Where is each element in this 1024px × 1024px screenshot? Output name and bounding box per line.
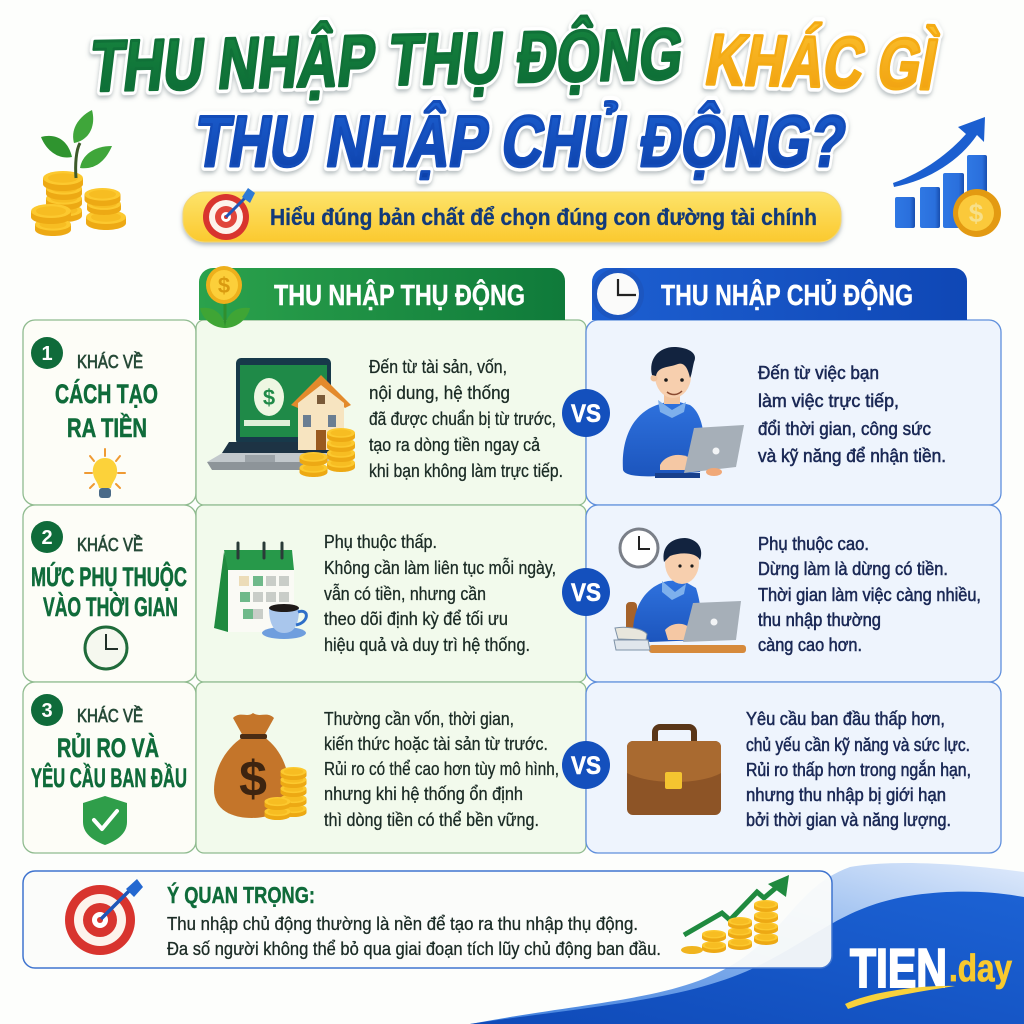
text: active row 1: làm việc trực tiếp, <box>758 390 899 411</box>
text: active row 1 <box>758 362 946 466</box>
text: active row 3 <box>746 708 971 830</box>
panel: label cách tạo ra tiền: KHÁC VỀ <box>77 351 143 372</box>
vs badge 2 <box>562 568 610 616</box>
text: passive row 3: nhưng khi hệ thống ổn định <box>324 784 523 804</box>
panel: active row 2 <box>586 505 1001 682</box>
panel: label rủi ro: 3 <box>41 700 53 722</box>
icon: money bag and coins: $ <box>239 751 267 807</box>
panel: label mức phụ thuộc: VÀO THỜI GIAN <box>43 591 178 622</box>
text: passive row 3 <box>324 709 559 830</box>
text: passive row 1: đã được chuẩn bị từ trước, <box>369 409 556 429</box>
callout text: Thu nhập chủ động thường là nền để tạo ra thu nhập thụ động. <box>167 914 638 934</box>
panel: label mức phụ thuộc: 2 <box>41 527 53 549</box>
icon: target <box>65 879 143 955</box>
icon: growth arrow and coin stacks <box>681 875 789 954</box>
text: passive row 3: thì dòng tiền có thể bền vững. <box>324 810 539 830</box>
column header: thu nhập chủ động: THU NHẬP CHỦ ĐỘNG <box>661 278 913 312</box>
icon: money bag and coins <box>214 713 306 820</box>
callout text: Đa số người không thể bỏ qua giai đoạn tích lũy chủ động ban đầu. <box>167 939 661 959</box>
callout: key takeaway <box>23 871 832 968</box>
icon: laptop, house and coins: $ <box>263 385 275 410</box>
text: active row 3: nhưng thu nhập bị giới hạn <box>746 784 946 805</box>
panel: passive row 1 <box>196 320 586 505</box>
vs badge 1 <box>562 389 610 437</box>
icon: rising chart with coin: $ <box>969 198 984 228</box>
title line 2: THU NHẬP CHỦ ĐỘNG? <box>189 101 852 182</box>
logo: tien.day <box>845 937 1012 1009</box>
text: active row 2 <box>758 533 981 655</box>
panel: label mức phụ thuộc: KHÁC VỀ <box>77 534 143 555</box>
icon: shield with check <box>83 796 127 845</box>
text: passive row 1 <box>369 357 563 481</box>
icon: laptop, house and coins <box>207 358 355 477</box>
title line 1: THU NHẬP THỤ ĐỘNG <box>86 14 688 107</box>
subtitle text: Hiểu đúng bản chất để chọn đúng con đường tài chính <box>270 204 817 230</box>
text: active row 1: đổi thời gian, công sức <box>758 418 931 439</box>
panel: passive row 3 <box>196 682 586 853</box>
title line 2: THU NHẬP CHỦ ĐỘNG? <box>189 101 852 182</box>
text: active row 3: Yêu cầu ban đầu thấp hơn, <box>746 708 945 729</box>
panel: label cách tạo ra tiền <box>23 320 196 505</box>
icon: man with laptop <box>623 347 744 478</box>
text: active row 2: Thời gian làm việc càng nhiều, <box>758 584 981 605</box>
logo: tien.day: TIEN <box>850 937 947 999</box>
text: passive row 1: tạo ra dòng tiền ngay cả <box>369 435 541 455</box>
icon: clock <box>592 268 644 320</box>
text: active row 1: và kỹ năng để nhận tiền. <box>758 445 946 466</box>
icon: coin plant <box>200 266 250 328</box>
panel: label cách tạo ra tiền: RA TIỀN <box>67 412 147 443</box>
vs badge 2: VS <box>571 579 601 607</box>
icon: clock <box>85 627 127 669</box>
callout heading: Ý QUAN TRỌNG: <box>167 881 315 908</box>
icon: target <box>203 188 255 240</box>
column header: thu nhập thụ động: THU NHẬP THỤ ĐỘNG <box>274 278 525 312</box>
text: active row 2: càng cao hơn. <box>758 634 862 655</box>
panel: active row 1 <box>586 320 1001 505</box>
text: passive row 2 <box>324 532 556 655</box>
text: passive row 2: hiệu quả và duy trì hệ thống. <box>324 635 530 655</box>
text: passive row 2: theo dõi định kỳ để tối ưu <box>324 609 508 629</box>
text: active row 3: chủ yếu cần kỹ năng và sức lực. <box>746 734 970 755</box>
icon: light bulb <box>85 449 125 498</box>
vs badge 3 <box>562 741 610 789</box>
title line 1: KHÁC GÌ <box>700 20 944 105</box>
panel: label mức phụ thuộc <box>23 505 196 682</box>
text: active row 1: Đến từ việc bạn <box>758 362 879 383</box>
title line 1: THU NHẬP THỤ ĐỘNG <box>86 14 688 107</box>
icon: tired man at desk <box>614 529 746 653</box>
background wave: bottom right <box>470 863 1024 1024</box>
panel: label mức phụ thuộc: MỨC PHỤ THUỘC <box>31 561 187 592</box>
text: passive row 2: Không cần làm liên tục mỗi ngày, <box>324 557 556 578</box>
text: active row 2: thu nhập thường <box>758 609 881 630</box>
vs badge 1: VS <box>571 400 601 428</box>
row 1 <box>23 320 1001 505</box>
text: passive row 1: Đến từ tài sản, vốn, <box>369 357 507 377</box>
subtitle pill <box>183 188 841 242</box>
panel: passive row 2 <box>196 505 586 682</box>
icon: rising chart with coin <box>893 117 1001 237</box>
icon: plant on coins <box>31 110 126 236</box>
icon: coin plant: $ <box>218 273 230 298</box>
row 3 <box>23 682 1001 853</box>
text: passive row 2: vẫn có tiền, nhưng cần <box>324 583 486 604</box>
text: active row 3: bởi thời gian và năng lượng. <box>746 809 951 830</box>
text: passive row 2: Phụ thuộc thấp. <box>324 532 437 552</box>
text: active row 2: Phụ thuộc cao. <box>758 533 869 554</box>
icon: briefcase <box>627 727 721 815</box>
logo: tien.day: .day <box>949 948 1012 990</box>
panel: label rủi ro: YÊU CẦU BAN ĐẦU <box>31 762 187 793</box>
panel: label rủi ro <box>23 682 196 853</box>
text: active row 3: Rủi ro thấp hơn trong ngắn hạn, <box>746 759 971 780</box>
icon: calendar and coffee cup <box>214 543 306 639</box>
panel: active row 3 <box>586 682 1001 853</box>
column header: thu nhập thụ động <box>199 266 565 328</box>
text: active row 2: Dừng làm là dừng có tiền. <box>758 558 948 579</box>
text: passive row 1: khi bạn không làm trực tiếp. <box>369 461 563 481</box>
panel: label rủi ro: KHÁC VỀ <box>77 705 143 726</box>
text: passive row 3: kiến thức hoặc tài sản từ trước. <box>324 734 548 754</box>
panel: label cách tạo ra tiền: CÁCH TẠO <box>55 378 158 409</box>
text: passive row 3: Thường cần vốn, thời gian, <box>324 709 514 729</box>
title <box>86 14 944 182</box>
callout text <box>167 914 661 959</box>
panel: label cách tạo ra tiền: 1 <box>41 343 53 365</box>
title line 1: KHÁC GÌ <box>700 20 944 105</box>
panel: label rủi ro: RỦI RO VÀ <box>57 731 159 763</box>
row 2 <box>23 505 1001 682</box>
column header: thu nhập chủ động <box>592 268 967 320</box>
text: passive row 1: nội dung, hệ thống <box>369 383 510 403</box>
vs badge 3: VS <box>571 752 601 780</box>
text: passive row 3: Rủi ro có thể cao hơn tùy mô hình, <box>324 759 559 779</box>
